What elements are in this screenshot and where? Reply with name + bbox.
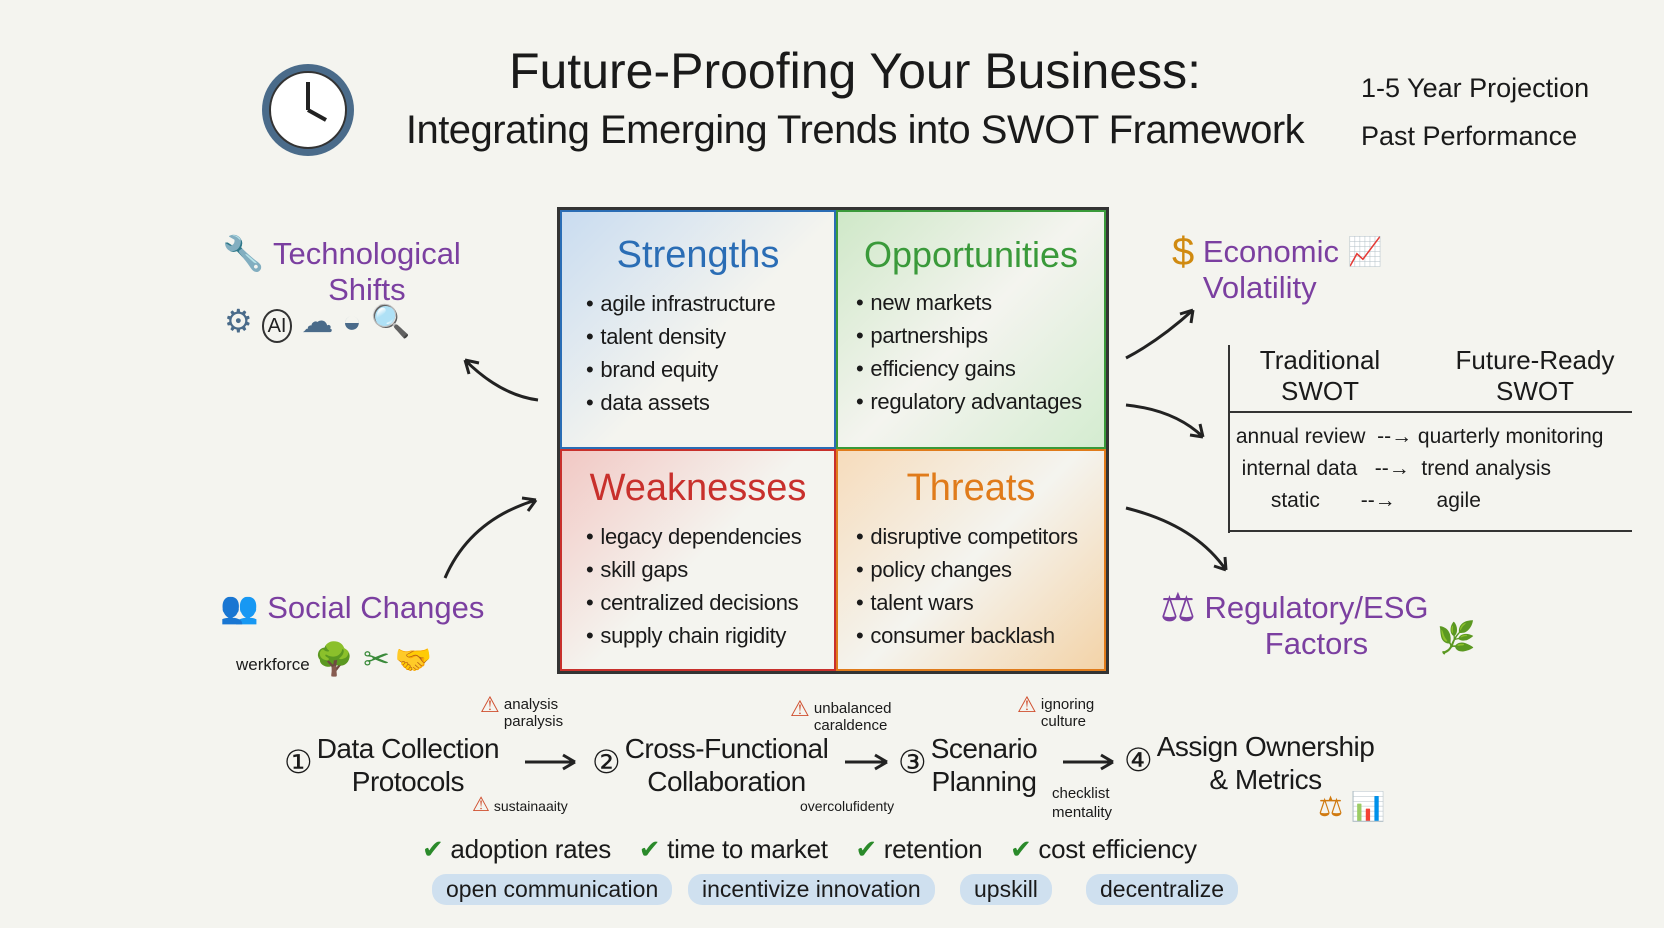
quadrant: weaknesses: skill gaps [600,557,688,582]
heading: regulatory/ESG: 🌿 [1437,620,1476,655]
heading: economic volatility: 📈 [1348,236,1382,267]
heading: economic volatility: $ [1172,230,1194,274]
heading: regulatory/ESG: ⚖ [1160,586,1196,630]
text: ⚖ 📊 [1318,791,1386,822]
quadrant: threats: disruptive competitors [870,524,1078,549]
text: & Metrics [1209,764,1322,795]
heading: social changes: 👥 Social Changes [220,590,484,625]
text: unbalanced [814,700,891,717]
quadrant: opportunities: regulatory advantages [870,389,1082,414]
text: ⚠ [790,696,810,721]
culture pills: open communication [446,876,658,902]
text: ③ [898,744,927,780]
quadrant: weaknesses [560,449,836,671]
process steps: Data Collection [317,733,499,764]
comparison table [1228,345,1632,533]
quadrant: opportunities: new markets [870,290,992,315]
icon: clock [262,64,354,156]
text: ⚠ [1017,692,1037,717]
text: checklist [1052,785,1110,802]
heading: technological shifts [222,234,461,307]
text: Assign Ownership [1157,731,1374,762]
title: Future-Proofing Your Business: [509,43,1201,99]
text: ② [592,744,621,780]
quadrant: threats [836,449,1106,671]
icons: tech: ⚙ AI ☁ ◒ 🔍 [224,303,410,339]
text: upskill [974,876,1038,902]
quadrant: strengths [560,210,836,449]
comparison table: internal data --→ trend analysis [1242,457,1551,480]
heading: regulatory/ESG [1160,586,1476,661]
quadrant: strengths: data assets [600,390,710,415]
quadrant: opportunities [836,210,1106,449]
quadrant: weaknesses: Weaknesses [590,467,806,509]
text: ④ [1124,742,1153,778]
heading: regulatory/ESG: Regulatory/ESG [1204,590,1428,625]
text: Collaboration [647,766,806,797]
quadrant: opportunities: Opportunities [864,234,1078,275]
comparison table: Traditional [1260,345,1380,375]
quadrant: opportunities: partnerships [870,323,988,348]
comparison table: Future-Ready [1456,345,1614,375]
text: decentralize [1100,876,1224,902]
comparison table: SWOT [1281,376,1359,406]
quadrant: opportunities: efficiency gains [870,356,1016,381]
quadrant: strengths: talent density [600,324,726,349]
title [406,43,1305,152]
text: culture [1041,713,1086,730]
text: incentivize innovation [702,876,921,902]
icons: social: werkforce 🌳 ✂ 🤝 [236,641,432,677]
heading: technological shifts: 🔧 [222,235,264,273]
heading: technological shifts: Shifts [328,272,406,307]
text: overcolufidenty [800,798,894,814]
heading: economic volatility [1172,230,1382,305]
quadrant: weaknesses: supply chain rigidity [600,623,786,648]
SWOT grid [557,207,1109,674]
quadrant: weaknesses: legacy dependencies [600,524,801,549]
text: caraldence [814,717,887,734]
text: ⚠ sustainaaity [472,794,568,816]
timeline labels: 1-5 Year Projection [1361,73,1589,103]
heading: regulatory/ESG: Factors [1265,626,1368,661]
quadrant: strengths: agile infrastructure [600,291,775,316]
quadrant: threats: talent wars [870,590,974,615]
warnings: analysis [504,696,558,713]
warnings: paralysis [504,713,563,730]
quadrant: threats: policy changes [870,557,1012,582]
text: ignoring [1041,696,1094,713]
process steps: Protocols [352,766,464,797]
heading: technological shifts: Technological [273,236,461,271]
quadrant: threats: consumer backlash [870,623,1055,648]
heading: economic volatility: Volatility [1203,270,1317,305]
heading: economic volatility: Economic [1203,234,1339,269]
quadrant: strengths: Strengths [617,234,779,276]
quadrant: weaknesses: centralized decisions [600,590,798,615]
process steps: ① [284,744,313,780]
metrics checks: ✔ adoption rates ✔ time to market ✔ retention ✔ cost efficiency [422,834,1197,864]
process steps [284,733,499,797]
quadrant: strengths: brand equity [600,357,718,382]
timeline labels [1361,73,1589,151]
timeline labels: Past Performance [1361,121,1577,151]
comparison table: static --→ agile [1271,489,1481,512]
text: Cross-Functional [625,733,828,764]
quadrant: threats: Threats [907,467,1035,509]
warnings: ⚠ [480,692,500,717]
comparison table: annual review --→ quarterly monitoring [1236,425,1604,448]
text: Planning [931,766,1036,797]
text: Scenario [931,733,1037,764]
title: Integrating Emerging Trends into SWOT Framework [406,108,1304,152]
comparison table: SWOT [1496,376,1574,406]
warnings [480,692,563,730]
text: mentality [1052,804,1112,821]
